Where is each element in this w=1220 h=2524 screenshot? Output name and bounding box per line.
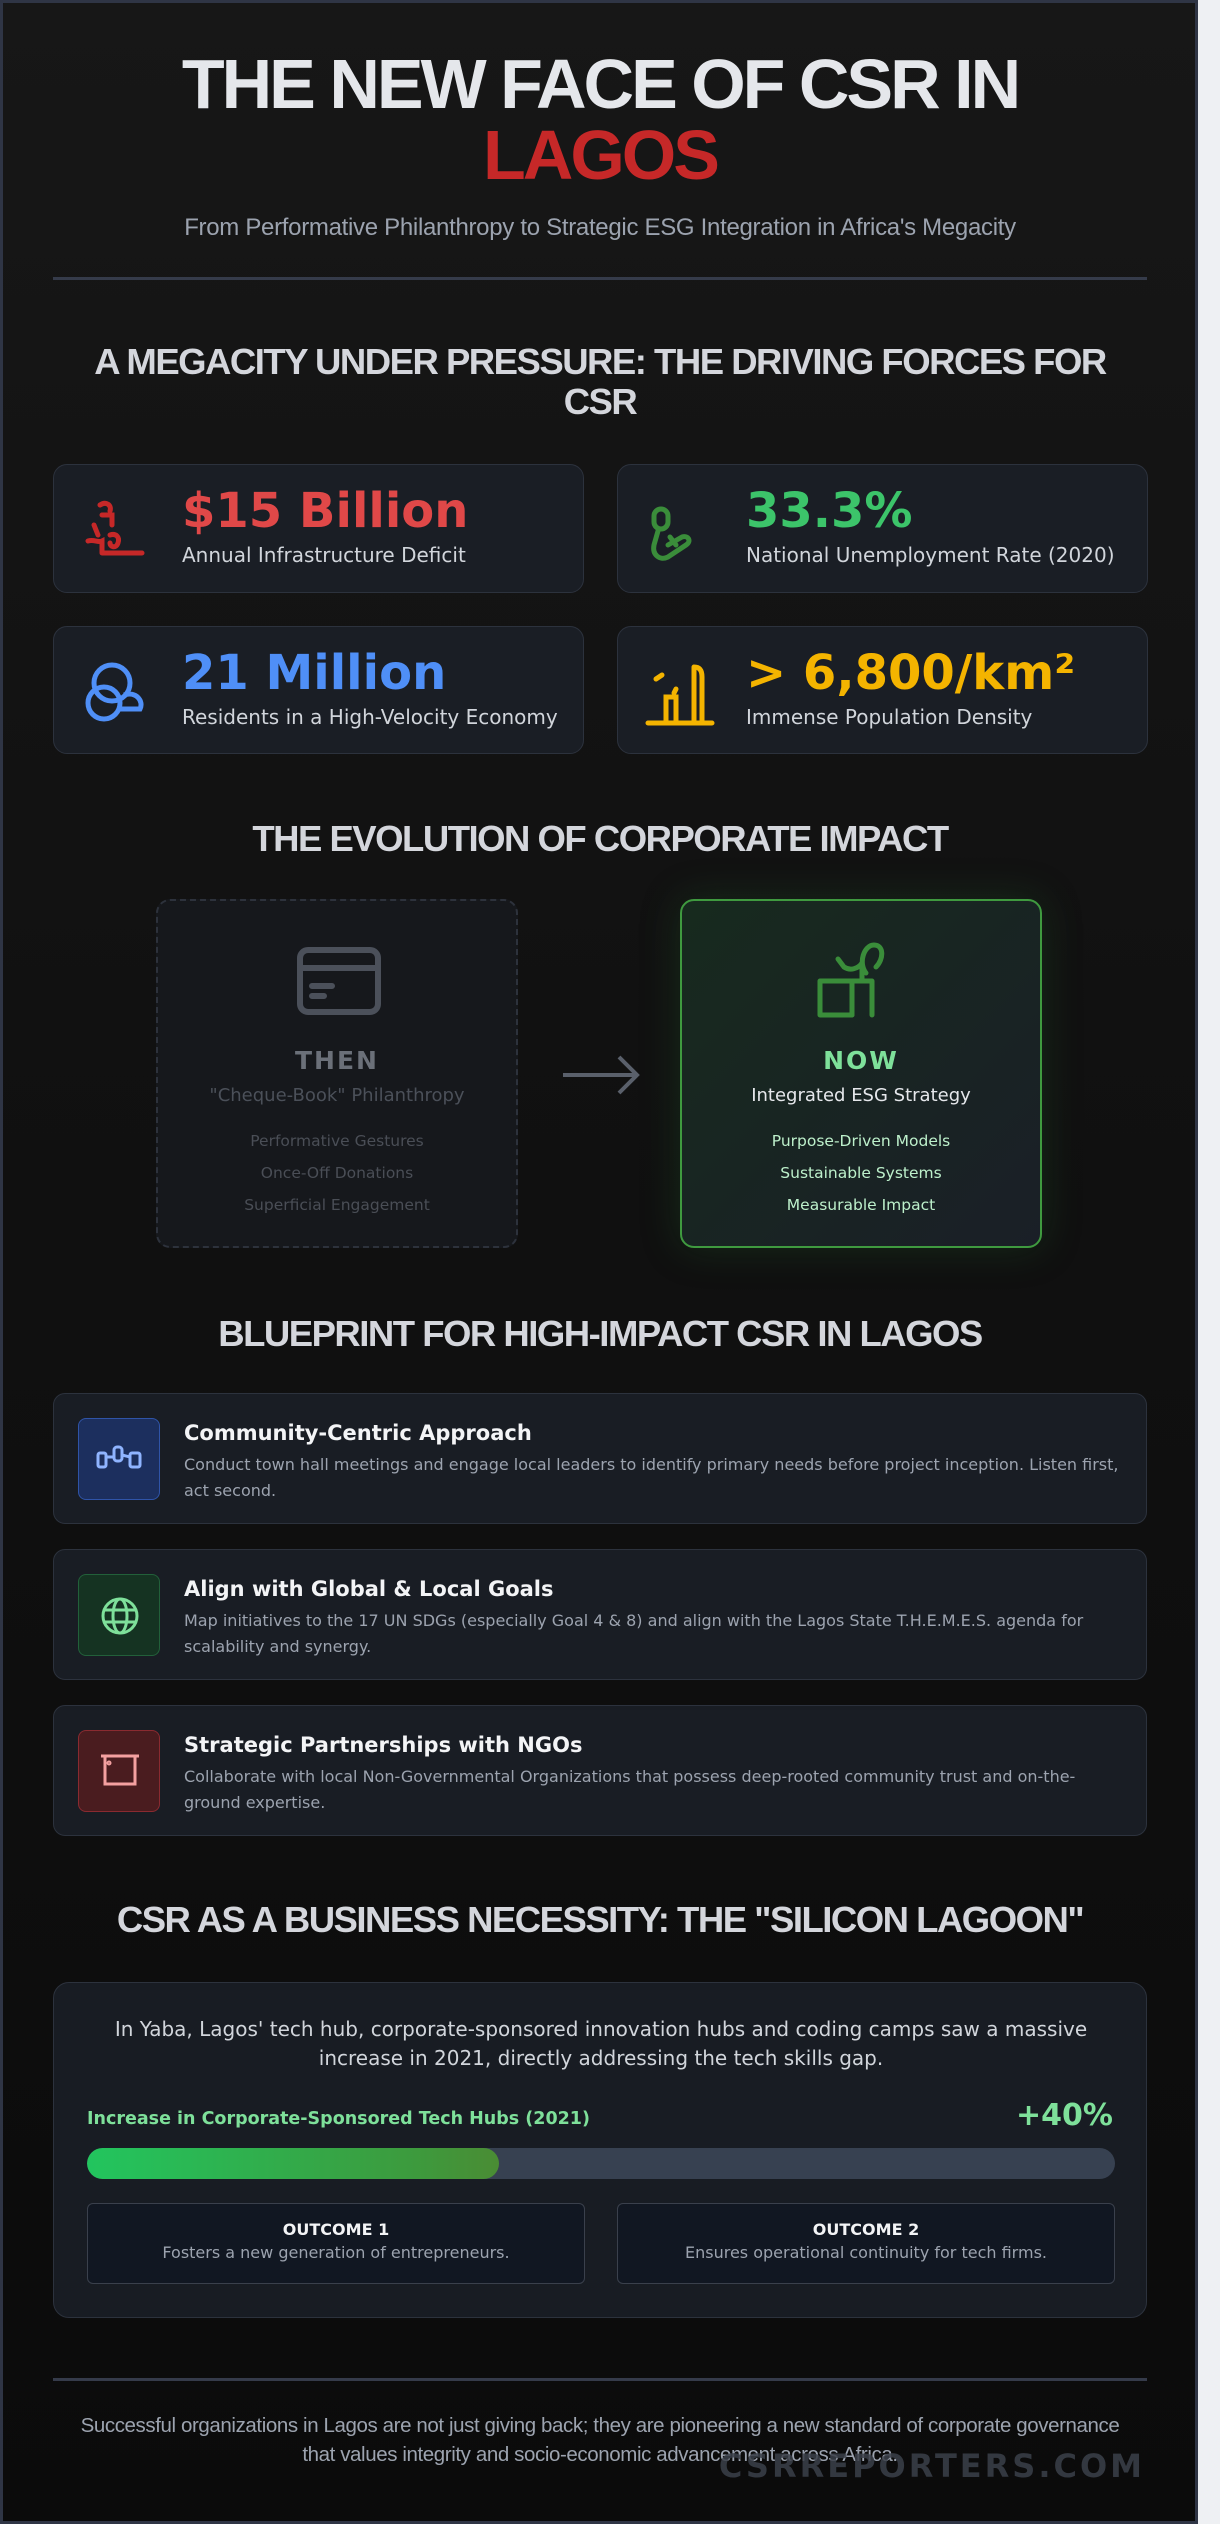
watermark: CSRREPORTERS.COM [719,2447,1145,2485]
outcome 2: Ensures operational continuity for tech firms. [685,2243,1047,2262]
title: LAGOS [483,116,717,194]
stat card: unemployment: National Unemployment Rate (2020) [746,543,1115,567]
blueprint item 2 [53,1549,1147,1680]
icon: community [78,1418,160,1500]
stat card: density: Immense Population Density [746,705,1032,729]
heading: megacity: A MEGACITY UNDER PRESSURE: THE DRIVING FORCES FOR CSR [94,341,1106,422]
blueprint item 1: Conduct town hall meetings and engage local leaders to identify primary needs before project inception. Listen first, act second. [184,1455,1118,1500]
heading: silicon lagoon: CSR AS A BUSINESS NECESSITY: THE "SILICON LAGOON" [117,1899,1083,1940]
outcome 2 [617,2203,1115,2284]
blueprint item 2: Map initiatives to the 17 UN SDGs (especially Goal 4 & 8) and align with the Lagos State T.H.E.M.E.S. agenda for scalability and synergy. [184,1611,1083,1656]
blueprint item 1: Community-Centric Approach [184,1421,532,1445]
intro text: In Yaba, Lagos' tech hub, corporate-sponsored innovation hubs and coding camps saw a massive increase in 2021, directly addressing the tech skills gap. [115,2017,1087,2070]
title [182,45,1018,194]
stat card: residents: Residents in a High-Velocity Economy [182,705,558,729]
icon: buildings [646,664,714,726]
outcome 1: Fosters a new generation of entrepreneurs. [162,2243,510,2262]
icon: card [297,947,381,1015]
footer text: Successful organizations in Lagos are not just giving back; they are pioneering a new standard of corporate governance that values integrity and socio-economic advancement across Africa. [81,2414,1119,2466]
panel: then: Once-Off Donations [261,1164,413,1182]
panel: then: Performative Gestures [250,1132,424,1150]
panel: silicon lagoon [53,1982,1147,2318]
arrow [563,1056,640,1094]
panel: now: Sustainable Systems [780,1164,942,1182]
stat card: residents: 21 Million [182,645,446,701]
panel: now: Purpose-Driven Models [772,1132,950,1150]
blueprint item 3: Collaborate with local Non-Governmental Organizations that possess deep-rooted community trust and on-the-ground expertise. [184,1767,1075,1812]
stat card: infrastructure: Annual Infrastructure Deficit [182,543,466,567]
blueprint item 3: Strategic Partnerships with NGOs [184,1733,582,1757]
icon: hand [651,506,692,561]
title: THE NEW FACE OF CSR IN [182,45,1018,123]
icon: globe [78,1574,160,1656]
stat card: density [617,626,1148,754]
outcome 1 [87,2203,585,2284]
icon: people [86,662,144,722]
bar label: Increase in Corporate-Sponsored Tech Hubs (2021) [87,2109,590,2129]
stat card: unemployment [617,464,1148,593]
panel: then [156,899,518,1248]
panel: now: Integrated ESG Strategy [751,1085,971,1106]
panel: then: "Cheque-Book" Philanthropy [209,1085,465,1106]
panel: now: Measurable Impact [787,1196,935,1214]
panel: then: Superficial Engagement [244,1196,430,1214]
icon: crane [86,500,144,556]
blueprint item 3 [53,1705,1147,1836]
progress bar [87,2148,1115,2179]
stat card: density: > 6,800/km² [746,645,1075,701]
heading: evolution: THE EVOLUTION OF CORPORATE IMPACT [252,818,948,859]
panel: then: THEN [295,1046,379,1075]
stat card: infrastructure [53,464,584,593]
stat card: residents [53,626,584,754]
heading: blueprint: BLUEPRINT FOR HIGH-IMPACT CSR IN LAGOS [218,1313,982,1354]
stat card: infrastructure: $15 Billion [182,483,468,539]
blueprint item 1 [53,1393,1147,1524]
outcome 2: OUTCOME 2 [813,2220,919,2239]
icon: partnership [78,1730,160,1812]
icon: plant [818,942,884,1018]
outcome 1: OUTCOME 1 [283,2220,389,2239]
panel: now [680,899,1042,1248]
bar value: +40% [1016,2098,1113,2133]
blueprint item 2: Align with Global & Local Goals [184,1577,554,1601]
stat card: unemployment: 33.3% [746,483,913,539]
panel: now: NOW [823,1046,899,1075]
subtitle: From Performative Philanthropy to Strategic ESG Integration in Africa's Megacity [184,214,1016,241]
